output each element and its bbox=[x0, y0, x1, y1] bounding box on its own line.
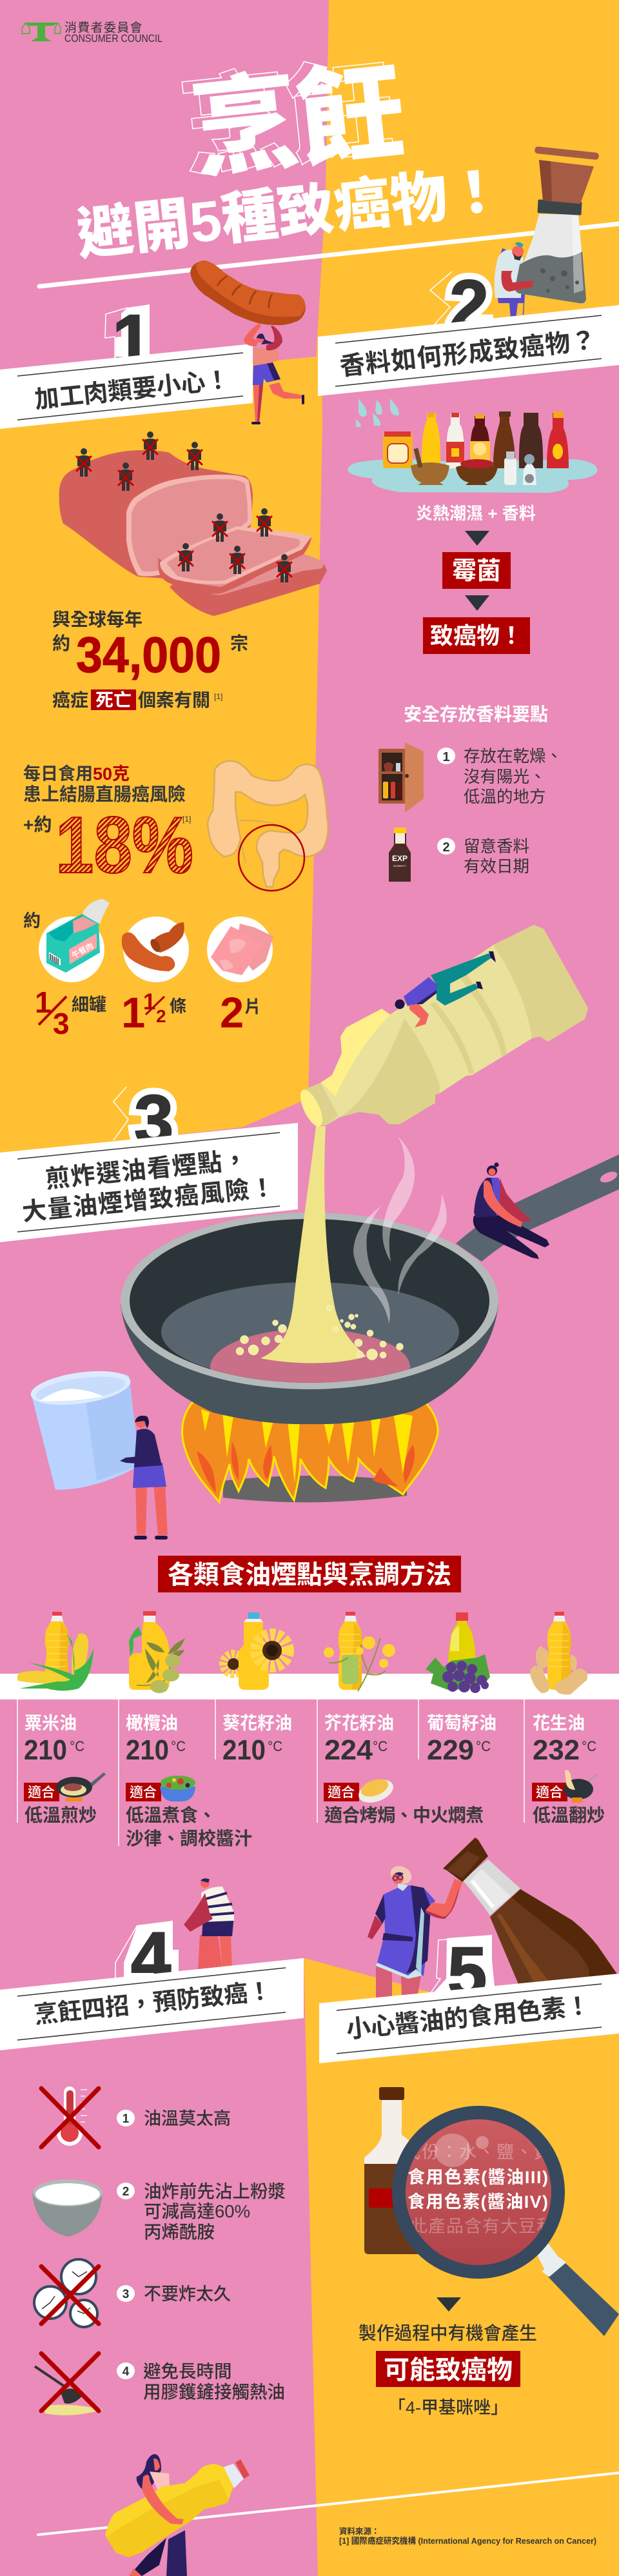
serving sizes: 1 bbox=[121, 989, 145, 1037]
logo: consumer council bbox=[22, 21, 162, 45]
illustration: pepper shaker with man bbox=[495, 146, 599, 319]
icon: meat slices bbox=[207, 916, 273, 982]
illustration: frying pan bbox=[121, 1154, 619, 1424]
olive oil info: 橄欖油 bbox=[126, 1714, 178, 1733]
title: 烹飪 bbox=[175, 49, 399, 189]
canola oil info: 適合烤焗、中火燜煮 bbox=[324, 1805, 484, 1825]
illustration: person holding soy bottle bbox=[368, 1863, 462, 1998]
icon: clocks crossed bbox=[34, 2259, 99, 2327]
peanut oil bottle bbox=[530, 1612, 587, 1694]
olive oil info: 適合 bbox=[130, 1785, 157, 1800]
text: about: 約 bbox=[23, 911, 41, 931]
illustration: striped man bbox=[184, 1878, 234, 1970]
serving sizes: 3 bbox=[53, 1007, 70, 1040]
illustration: measuring cup bbox=[28, 1365, 140, 1490]
sunflower oil info bbox=[222, 1714, 292, 1766]
text: 4-MEI: 「4-甲基咪唑」 bbox=[388, 2398, 508, 2417]
arrow down bbox=[465, 595, 489, 611]
icon: pan with steak bbox=[56, 1772, 106, 1801]
illustration: colon bbox=[208, 761, 328, 891]
canola oil info: 芥花籽油 bbox=[324, 1714, 394, 1733]
canola oil info: 224 bbox=[324, 1734, 373, 1766]
banner 5: 小心醬油的食用色素！ bbox=[345, 1992, 591, 2044]
carcinogen box bbox=[423, 617, 530, 654]
tip 4: 避免長時間 bbox=[143, 2361, 232, 2381]
tip 2: 2 bbox=[123, 2185, 129, 2199]
text: 34,000 deaths: 約 bbox=[52, 633, 70, 653]
illustration: puddle bbox=[348, 459, 597, 493]
magnifier bbox=[392, 2106, 619, 2336]
illustration: spice bottles bbox=[383, 411, 569, 485]
olive oil bottle bbox=[129, 1611, 184, 1693]
serving sizes: 細罐 bbox=[72, 995, 106, 1015]
carcinogen box: 致癌物！ bbox=[430, 622, 523, 649]
illustration: sausage bbox=[190, 261, 306, 325]
oil table heading: 各類食油煙點與烹調方法 bbox=[168, 1561, 451, 1589]
number 4: 4 bbox=[131, 1917, 171, 1998]
icon: canned meat: 午餐肉 bbox=[70, 940, 95, 960]
corn oil info: °C bbox=[70, 1738, 84, 1754]
logo: consumer council: 消費者委員會 bbox=[64, 21, 143, 35]
magnifier: 成份：水、鹽、黃豆 bbox=[403, 2143, 571, 2162]
corn oil info: 低溫煎炒 bbox=[25, 1805, 97, 1825]
icon: batter bowl bbox=[32, 2179, 103, 2237]
source: [1] 國際癌症研究機構 (International Agency for Research on Cancer) bbox=[339, 2536, 596, 2546]
icon: EXP bottle: EXP bbox=[392, 854, 408, 863]
canola oil info: °C bbox=[373, 1738, 388, 1754]
corn oil bottle bbox=[17, 1612, 93, 1691]
number 2 bbox=[430, 266, 489, 345]
serving sizes: 1 bbox=[143, 989, 155, 1015]
serving sizes: 1 bbox=[35, 986, 52, 1019]
storage tip 2: 2 bbox=[442, 840, 450, 855]
banner 5 bbox=[319, 1974, 619, 2063]
olive oil info: 沙律、調校醬汁 bbox=[126, 1828, 252, 1848]
source bbox=[339, 2526, 596, 2546]
canola oil info: 適合 bbox=[328, 1785, 355, 1800]
arrow down bbox=[465, 531, 489, 546]
tip 4: 用膠鑊鏟接觸熱油 bbox=[143, 2382, 285, 2402]
illustration: flames bbox=[182, 1402, 438, 1502]
text: 50g colorectal risk: 每日食用50克 bbox=[23, 764, 130, 784]
text: 34,000 deaths: 死亡 bbox=[95, 690, 132, 710]
icon: sausages bbox=[122, 916, 189, 982]
peanut oil info: 花生油 bbox=[533, 1714, 585, 1733]
icon: EXP bottle bbox=[389, 827, 411, 882]
banner 1 bbox=[0, 344, 253, 429]
icon: cupboard bbox=[378, 742, 424, 813]
illustration: large soy bottle bbox=[443, 1838, 618, 1996]
icon: EXP bottle: DD/MM/YY bbox=[393, 864, 406, 867]
text: 50g colorectal risk: +約 bbox=[23, 815, 52, 835]
grape oil info: 229 bbox=[427, 1734, 474, 1766]
grape oil info bbox=[427, 1714, 496, 1766]
magnifier: 食用色素(醬油III) bbox=[408, 2168, 548, 2187]
background: yellow section 1 bbox=[0, 356, 322, 1154]
number 5 bbox=[431, 1933, 495, 2012]
storage tip 2: 留意香料 bbox=[464, 838, 529, 856]
title bbox=[74, 49, 507, 266]
illustration: woman carrying oil bottle bbox=[105, 2454, 250, 2576]
icon: canned meat bbox=[39, 899, 110, 982]
illustration: ham with crossed-out people bbox=[59, 450, 327, 616]
grape oil info: 葡萄籽油 bbox=[427, 1714, 496, 1733]
banner 3: 煎炸選油看煙點， bbox=[44, 1146, 250, 1194]
banner 3: 大量油煙增致癌風險！ bbox=[21, 1174, 277, 1227]
tip 1: 油溫莫太高 bbox=[144, 2109, 231, 2128]
storage tip 1: 低溫的地方 bbox=[464, 788, 546, 806]
storage tip 1: 1 bbox=[442, 750, 450, 764]
tip 2: 油炸前先沾上粉漿 bbox=[144, 2181, 286, 2201]
number 3 bbox=[113, 1081, 173, 1160]
text: 34,000 deaths: 癌症 bbox=[52, 690, 88, 710]
source: 資料來源： bbox=[339, 2526, 380, 2536]
banner 2: 香料如何形成致癌物？ bbox=[339, 326, 598, 381]
storage tip 1: 存放在乾燥、 bbox=[464, 748, 562, 766]
icon: wok stir-fry bbox=[564, 1770, 596, 1803]
serving sizes: 2 bbox=[220, 989, 244, 1037]
olive oil info: °C bbox=[171, 1738, 186, 1754]
storage heading: 安全存放香料要點 bbox=[404, 704, 548, 724]
text: 50g colorectal risk: [1] bbox=[182, 815, 191, 824]
sunflower oil info: 葵花籽油 bbox=[222, 1714, 292, 1733]
serving sizes: 條 bbox=[170, 996, 186, 1016]
background: yellow section 5 bbox=[304, 1958, 619, 2576]
text: 34,000 deaths: 與全球每年 bbox=[52, 609, 142, 629]
mould box: 霉菌 bbox=[452, 558, 501, 585]
tip 3: 不要炸太久 bbox=[144, 2284, 231, 2304]
illustration: steam bbox=[353, 1136, 447, 1323]
corn oil info: 適合 bbox=[28, 1785, 55, 1800]
magnifier: 此產品含有大豆和 bbox=[410, 2217, 555, 2236]
arrow down bbox=[437, 2297, 461, 2312]
olive oil info: 低溫煮食、 bbox=[126, 1805, 216, 1825]
tip 4 bbox=[117, 2361, 285, 2402]
illustration: oil bottle bbox=[296, 925, 588, 1129]
corn oil info: 粟米油 bbox=[25, 1714, 77, 1733]
text: 34,000 deaths: [1] bbox=[214, 692, 222, 701]
text: produced during manufacture: 製作過程中有機會產生 bbox=[359, 2323, 537, 2343]
illustration: woman holding cup bbox=[120, 1416, 168, 1540]
serving sizes: 2 bbox=[156, 1006, 166, 1026]
sunflower oil info: °C bbox=[268, 1738, 282, 1754]
number 3: 3 bbox=[134, 1081, 173, 1160]
peanut oil info: 低溫翻炒 bbox=[533, 1805, 605, 1825]
tip 2: 可減高達60% bbox=[144, 2201, 250, 2221]
illustration: burner bbox=[223, 1476, 407, 1502]
peanut oil info bbox=[532, 1714, 605, 1825]
text: 50g colorectal risk bbox=[23, 764, 193, 890]
sunflower oil bottle bbox=[224, 1612, 288, 1690]
serving sizes bbox=[35, 986, 261, 1040]
banner 1: 加工肉類要小心！ bbox=[34, 366, 231, 414]
illustration: woman lifting sausage bbox=[244, 323, 304, 424]
number 2: 2 bbox=[449, 266, 489, 345]
illustration: oil stream and bubbles bbox=[236, 1126, 404, 1363]
banner 2 bbox=[318, 305, 619, 396]
tip 4: 4 bbox=[123, 2365, 130, 2379]
illustration: soy bottle with label bbox=[364, 2087, 419, 2254]
number 5: 5 bbox=[447, 1933, 487, 2012]
text: 34,000 deaths: 個案有關 bbox=[138, 690, 210, 710]
sunflower oil info: 210 bbox=[222, 1734, 266, 1766]
grape oil bottle bbox=[426, 1612, 490, 1693]
tip 2: 丙烯酰胺 bbox=[144, 2222, 215, 2242]
number 2: 2 bbox=[449, 266, 489, 345]
olive oil info: 210 bbox=[126, 1734, 169, 1766]
canola oil info bbox=[324, 1714, 484, 1825]
logo: consumer council: CONSUMER COUNCIL bbox=[64, 32, 162, 45]
icon: gratin dish bbox=[355, 1775, 397, 1807]
peanut oil info: 適合 bbox=[536, 1785, 563, 1800]
illustration: woman sitting on handle bbox=[473, 1162, 549, 1259]
number 3: 3 bbox=[134, 1081, 173, 1160]
illustration: man climbing bottle bbox=[395, 951, 496, 1027]
icon: salad bowl bbox=[160, 1776, 195, 1801]
flow: heat + spices: 炎熱潮濕 + 香料 bbox=[416, 504, 536, 523]
canola oil bottle bbox=[324, 1612, 395, 1691]
column dividers bbox=[17, 1699, 524, 1846]
peanut oil info: 232 bbox=[533, 1734, 580, 1766]
banner 4 bbox=[0, 1958, 304, 2050]
storage tip 1 bbox=[437, 748, 562, 806]
corn oil info: 210 bbox=[24, 1734, 67, 1766]
corn oil info bbox=[24, 1714, 97, 1825]
olive oil info bbox=[126, 1714, 252, 1848]
mould box bbox=[442, 552, 511, 589]
storage tip 2 bbox=[437, 838, 529, 876]
white band bbox=[0, 1674, 619, 1699]
bottom divider line bbox=[38, 2473, 619, 2535]
number 1: 1 bbox=[112, 300, 152, 381]
tip 3: 3 bbox=[123, 2288, 129, 2301]
background: yellow top right bbox=[316, 0, 619, 361]
number 4 bbox=[115, 1917, 179, 1998]
magnifier: 食用色素(醬油IV) bbox=[408, 2192, 548, 2212]
icon: thermometer crossed bbox=[41, 2086, 99, 2147]
title: 避開5種致癌物！ bbox=[74, 159, 507, 266]
title divider line bbox=[39, 224, 619, 286]
storage tip 2: 有效日期 bbox=[464, 858, 529, 876]
text: 34,000 deaths bbox=[52, 609, 248, 710]
serving sizes: 片 bbox=[244, 997, 261, 1016]
icon: plastic spatula crossed bbox=[35, 2353, 103, 2415]
storage tip 1: 沒有陽光、 bbox=[464, 768, 546, 786]
people icons: deaths bbox=[77, 431, 291, 582]
illustration: water drops bbox=[356, 399, 399, 427]
text: 50g colorectal risk: 18% bbox=[55, 801, 193, 890]
text: 50g colorectal risk: 患上結腸直腸癌風險 bbox=[23, 784, 186, 804]
peanut oil info: °C bbox=[582, 1738, 596, 1754]
text: 34,000 deaths: 34,000 bbox=[76, 626, 221, 683]
grape oil info: °C bbox=[476, 1738, 491, 1754]
tip 2 bbox=[117, 2181, 286, 2242]
text: 34,000 deaths: 宗 bbox=[230, 633, 248, 653]
title: 烹飪 bbox=[186, 51, 410, 192]
banner 3 bbox=[0, 1123, 298, 1242]
banner 4: 烹飪四招，預防致癌！ bbox=[33, 1977, 273, 2028]
possible carcinogen box: 可能致癌物 bbox=[384, 2356, 513, 2384]
tip 1: 1 bbox=[123, 2112, 130, 2126]
